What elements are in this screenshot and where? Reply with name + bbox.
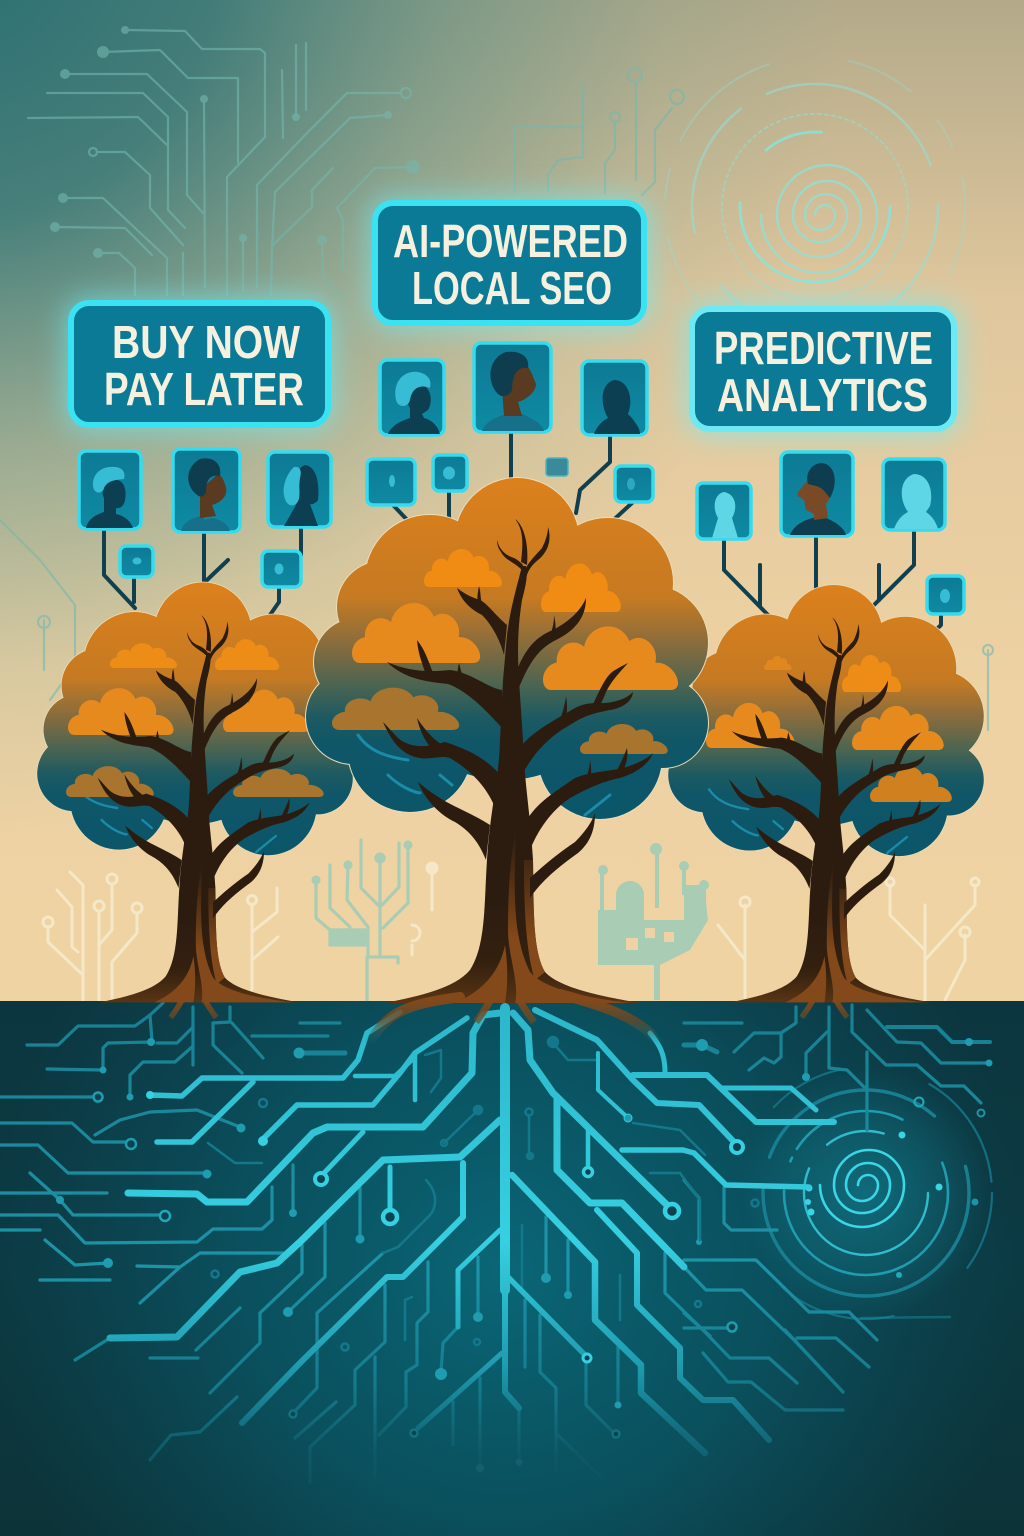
label: Predictive Analytics	[685, 302, 961, 436]
pale circuit trees behind the canopy	[43, 840, 979, 1000]
sky background	[0, 0, 1024, 1002]
circuit roots: left field traces	[0, 1003, 345, 1460]
profile cards: AI-Powered Local SEO	[367, 343, 653, 505]
circuit roots: right field traces	[684, 1005, 990, 1410]
circuit roots: dim details	[208, 1037, 758, 1350]
background circuit lines: upper middle	[0, 68, 993, 730]
tree: Predictive Analytics	[668, 585, 984, 1017]
lower spiral	[740, 1067, 992, 1319]
tree: Buy Now Pay Later stems	[104, 528, 301, 615]
label: AI-Powered Local SEO: AI-POWERED	[393, 215, 628, 267]
tree: AI-Powered Local SEO	[306, 478, 708, 1068]
tree: AI-Powered Local SEO stems	[393, 433, 632, 525]
circuit roots: bright main traces	[110, 1008, 834, 1453]
upper spiral	[665, 57, 965, 357]
underground panel	[0, 1001, 1024, 1536]
label: Predictive Analytics: PREDICTIVE	[714, 322, 933, 374]
label: Predictive Analytics: ANALYTICS	[717, 369, 928, 421]
label: Buy Now Pay Later: PAY LATER	[104, 363, 304, 415]
background circuit lines: upper left	[28, 26, 420, 297]
circuit node rings	[94, 1092, 743, 1438]
profile cards: Buy Now Pay Later	[79, 449, 331, 587]
label: Buy Now Pay Later	[64, 296, 335, 432]
label: Buy Now Pay Later: BUY NOW	[112, 316, 300, 368]
profile cards: Predictive Analytics	[697, 452, 964, 614]
circuit roots: centre medium traces	[56, 1038, 992, 1483]
tree: Predictive Analytics stems	[724, 531, 941, 647]
label: AI-Powered Local SEO	[368, 196, 651, 330]
label: AI-Powered Local SEO: LOCAL SEO	[412, 262, 612, 314]
tree: Buy Now Pay Later	[37, 582, 353, 1018]
